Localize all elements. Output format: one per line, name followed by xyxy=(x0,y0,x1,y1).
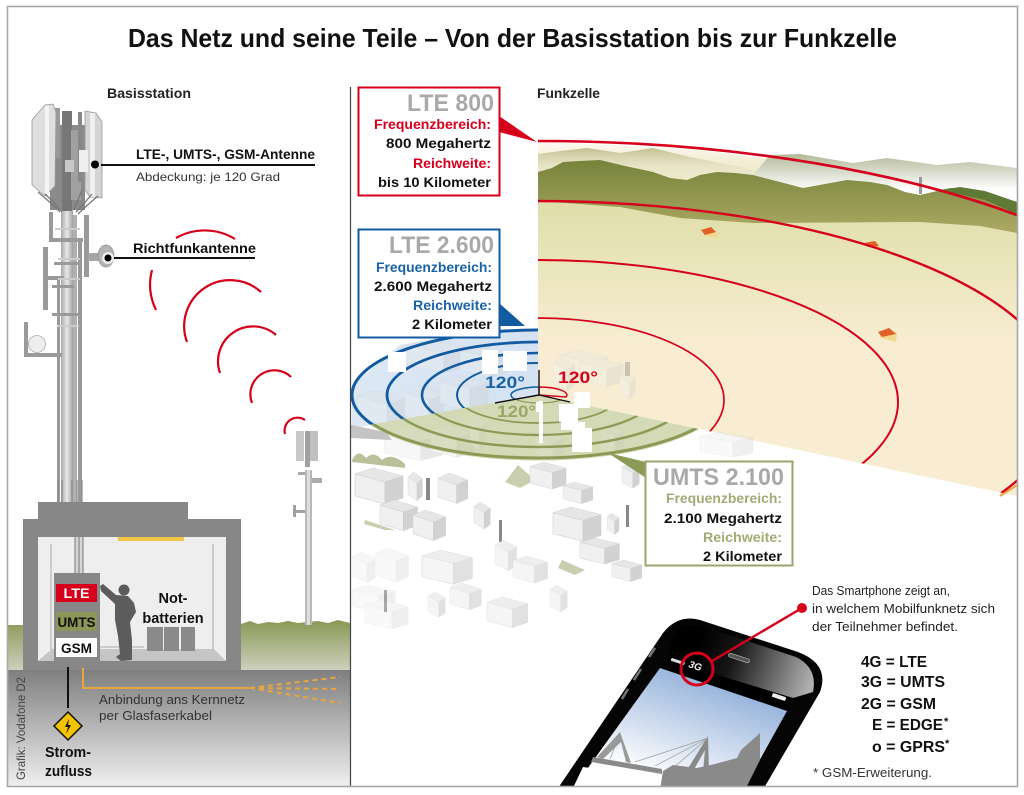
tan buildings in red sector xyxy=(553,350,635,399)
callout: LTE 800: Frequenzbereich: xyxy=(374,116,491,132)
callout: UMTS 2100: UMTS 2.100 xyxy=(653,464,784,491)
divider xyxy=(350,87,352,787)
UMTS 2100 green arcs xyxy=(371,400,698,460)
callout: LTE 2600: 2.600 Megahertz xyxy=(374,278,492,294)
faded lower buildings xyxy=(422,540,567,628)
right bridge pylon xyxy=(689,736,709,768)
title: Das Netz und seine Teile – Von der Basisstation bis zur Funkzelle xyxy=(128,23,897,53)
axis lines xyxy=(495,370,570,403)
text: Anbindung: per Glasfaserkabel xyxy=(99,709,212,723)
label line: microwave: Richtfunkantenne xyxy=(133,241,257,256)
text: Stromzufluss: zufluss xyxy=(45,764,92,780)
LTE 2600 blue arcs xyxy=(351,328,538,425)
phone body xyxy=(550,619,822,795)
screen xyxy=(588,668,787,782)
legend: network codes: 2G = GSM xyxy=(861,696,936,713)
icon: house 2 xyxy=(864,241,880,250)
panel: basisstation xyxy=(8,104,350,787)
small masts xyxy=(384,478,629,612)
small dish xyxy=(28,336,46,352)
text: Notbatterien: batterien xyxy=(142,611,204,627)
icon: small distant tower xyxy=(293,431,322,625)
city buildings xyxy=(352,432,753,629)
radio waves xyxy=(150,230,305,434)
coverage rings xyxy=(0,141,1024,659)
distant mast xyxy=(919,177,922,194)
legend: network codes: 3G = UMTS xyxy=(861,674,945,691)
legend: network codes: * xyxy=(944,716,949,728)
text: smartphone explanation: Das Smartphone zeigt an, xyxy=(812,584,950,598)
power line xyxy=(67,667,69,708)
callout: LTE 2600: LTE 2.600 xyxy=(389,232,494,259)
legend: network codes xyxy=(861,654,950,756)
panel: funkzelle landscape xyxy=(538,141,1017,496)
bridge deck xyxy=(591,757,662,774)
UMTS module: UMTS xyxy=(58,614,96,630)
text: Anbindung: Anbindung ans Kernnetz xyxy=(99,693,245,707)
callout: LTE 800: LTE 800 xyxy=(407,90,494,117)
text: Anbindung xyxy=(99,693,245,723)
label line: antenna: Abdeckung: je 120 Grad xyxy=(136,170,280,184)
label: 120 red: 120° xyxy=(558,368,598,387)
dark trees right edge xyxy=(940,187,1017,214)
underground xyxy=(8,670,350,787)
red zoom marker xyxy=(681,603,807,685)
batteries xyxy=(147,627,195,651)
microwave dish xyxy=(88,245,114,267)
text: Notbatterien: Not- xyxy=(158,591,188,607)
GSM module: GSM xyxy=(61,640,92,656)
callout: LTE 800: Reichweite: xyxy=(413,155,491,171)
inner red arc xyxy=(539,387,567,397)
icon: house 1 xyxy=(701,227,717,238)
pointer: green xyxy=(608,453,646,478)
cables xyxy=(610,738,708,766)
side buttons xyxy=(622,648,655,699)
footnote: * GSM-Erweiterung. xyxy=(813,766,932,780)
callout: UMTS 2100 xyxy=(646,462,792,566)
LTE 800 red arcs xyxy=(538,140,1017,493)
buildings under green sector xyxy=(385,415,624,461)
cabinet xyxy=(54,573,100,661)
speaker xyxy=(728,653,750,663)
callout: LTE 2600 xyxy=(358,230,500,338)
text: Notbatterien xyxy=(142,591,204,627)
fibre cable xyxy=(83,668,340,703)
blue sector tint xyxy=(352,332,538,428)
glossy top bezel xyxy=(714,634,814,698)
text: Stromzufluss xyxy=(45,745,92,780)
trees xyxy=(352,453,405,468)
callout: UMTS 2100: Frequenzbereich: xyxy=(666,490,782,506)
mast through roof xyxy=(58,480,83,573)
brackets xyxy=(24,212,89,357)
legend: network codes: 4G = LTE xyxy=(861,654,927,671)
person silhouette xyxy=(100,584,136,661)
label line: antenna xyxy=(91,147,315,184)
pointer: red xyxy=(499,116,537,142)
floor xyxy=(38,649,226,661)
label line: microwave xyxy=(104,241,257,262)
panel: green UMTS 2100 sector xyxy=(351,395,724,461)
callout: UMTS 2100: Reichweite: xyxy=(703,529,782,545)
icon: house 3 xyxy=(878,328,897,342)
text: smartphone explanation xyxy=(812,584,995,634)
heading: Basisstation: Basisstation xyxy=(107,86,191,101)
label: 120 green: 120° xyxy=(497,402,536,421)
callout: LTE 2600: Reichweite: xyxy=(413,297,492,313)
road xyxy=(574,767,588,786)
text: smartphone explanation: in welchem Mobilfunknetz sich xyxy=(812,602,995,616)
panel: blue LTE 2600 sector xyxy=(352,332,538,428)
heading: Funkzelle: Funkzelle xyxy=(537,86,601,101)
antenna head xyxy=(32,104,102,214)
far hills xyxy=(538,148,1017,205)
3G label: 3G xyxy=(687,659,703,674)
cross bands xyxy=(55,228,80,327)
callout: LTE 800: bis 10 Kilometer xyxy=(378,174,492,190)
lawn patches xyxy=(364,465,585,575)
left parking strip xyxy=(351,425,392,440)
building shell xyxy=(23,502,241,670)
status bar xyxy=(728,678,793,698)
text: Stromzufluss: Strom- xyxy=(45,745,91,761)
left bridge pylon xyxy=(597,732,631,763)
icon: main tower xyxy=(24,104,114,520)
pointer: blue xyxy=(499,303,525,326)
callout: LTE 800 xyxy=(358,88,500,196)
orange line lower right xyxy=(1000,485,1017,496)
icon: warning diamond xyxy=(54,712,82,740)
green sector base xyxy=(352,395,724,461)
callout: LTE 2600: 2 Kilometer xyxy=(412,316,493,332)
legend: network codes: o = GPRS xyxy=(872,739,945,756)
legend: network codes: * xyxy=(945,738,950,750)
buildings under blue sector xyxy=(357,340,508,426)
rails xyxy=(57,205,82,520)
city mass xyxy=(660,733,760,790)
wall lines xyxy=(51,544,213,650)
LTE module: LTE xyxy=(64,585,90,601)
credit: Grafik: Vodafone D2 xyxy=(14,677,28,780)
white antenna blocks xyxy=(388,350,592,452)
forest ridge xyxy=(538,160,1017,233)
callout: UMTS 2100: 2.100 Megahertz xyxy=(664,510,782,526)
land surface of the LTE 800 sector xyxy=(538,141,1017,496)
skyline xyxy=(572,732,760,790)
ceiling lamp xyxy=(118,537,184,541)
text: smartphone explanation: der Teilnehmer befindet. xyxy=(812,620,958,634)
grass xyxy=(8,620,350,670)
interior xyxy=(38,537,226,661)
callout: LTE 800: 800 Megahertz xyxy=(386,135,491,151)
panel: smartphone xyxy=(550,619,822,795)
blue sector base xyxy=(352,332,538,428)
signal and battery xyxy=(671,658,786,701)
callout: UMTS 2100: 2 Kilometer xyxy=(703,548,783,564)
label: 120 blue: 120° xyxy=(485,373,525,392)
green sector tint xyxy=(361,396,699,460)
legend: network codes: E = EDGE xyxy=(872,717,943,734)
callout: LTE 2600: Frequenzbereich: xyxy=(376,259,492,275)
label line: antenna: LTE-, UMTS-, GSM-Antenne xyxy=(136,147,315,162)
